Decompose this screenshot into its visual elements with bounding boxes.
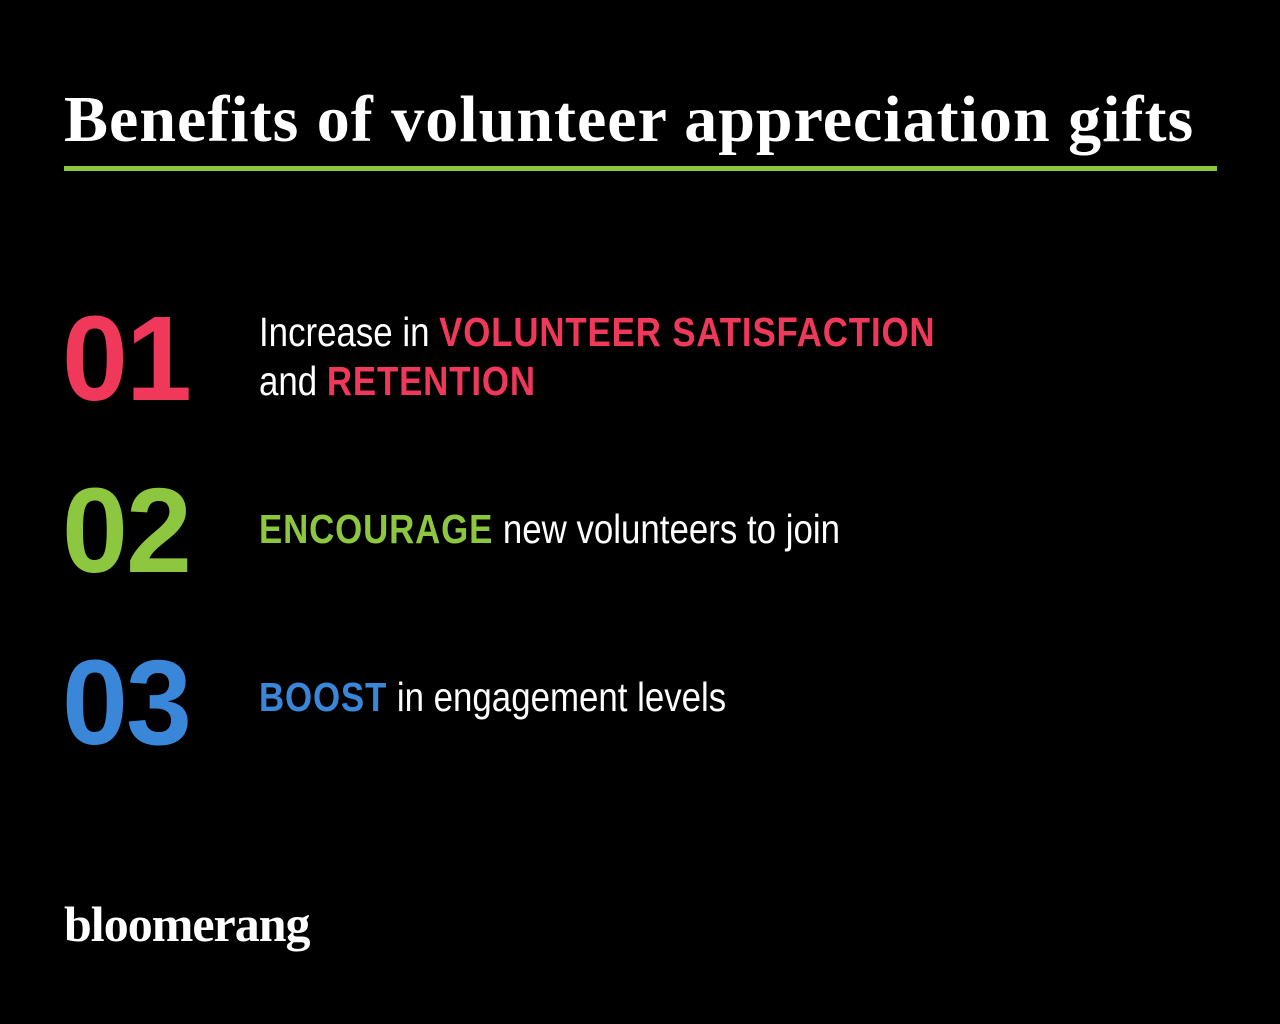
logo: bloomerang (64, 896, 310, 952)
text block 03: BOOST in engagement levels (259, 674, 726, 720)
number 02: 02 (62, 462, 190, 598)
text block 01: Increase in VOLUNTEER SATISFACTION (259, 309, 935, 355)
number 01: 01 (62, 290, 190, 426)
text block 01: and RETENTION (259, 358, 536, 404)
text block 02: ENCOURAGE new volunteers to join (259, 506, 840, 552)
text block 01 (259, 309, 935, 404)
title: Benefits of volunteer appreciation gifts (64, 83, 1194, 156)
number 03: 03 (62, 634, 190, 770)
